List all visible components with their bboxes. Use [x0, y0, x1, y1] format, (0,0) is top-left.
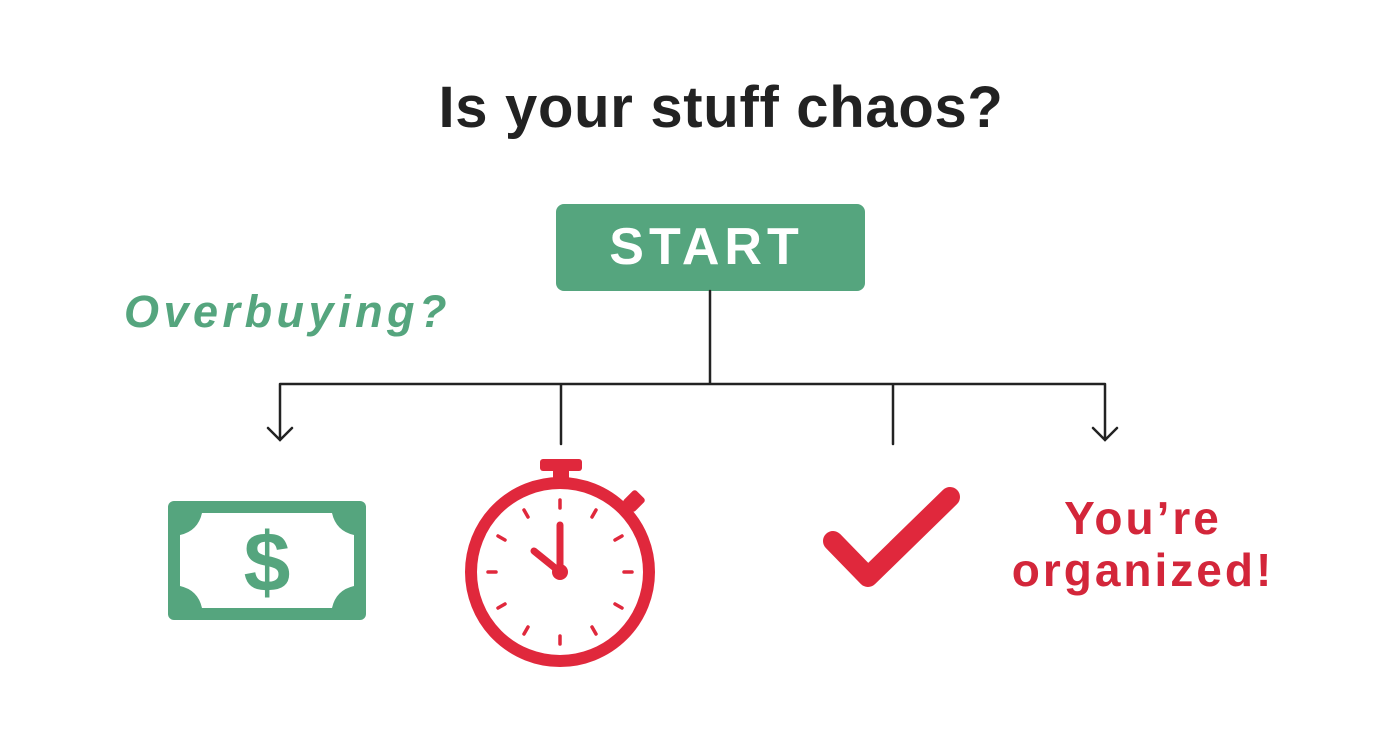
icon: dollar bill: $ [244, 515, 290, 609]
start box: START [609, 218, 804, 276]
text: you're organized [1012, 492, 1274, 596]
icon: checkmark [823, 487, 960, 587]
icon: dollar bill [168, 501, 366, 620]
title: Is your stuff chaos? [438, 75, 1004, 140]
text: you're organized: organized! [1012, 544, 1274, 596]
start box [556, 204, 865, 291]
icon: stopwatch [465, 459, 655, 667]
label: overbuying: Overbuying? [124, 286, 451, 337]
text: you're organized: You’re [1064, 492, 1222, 544]
